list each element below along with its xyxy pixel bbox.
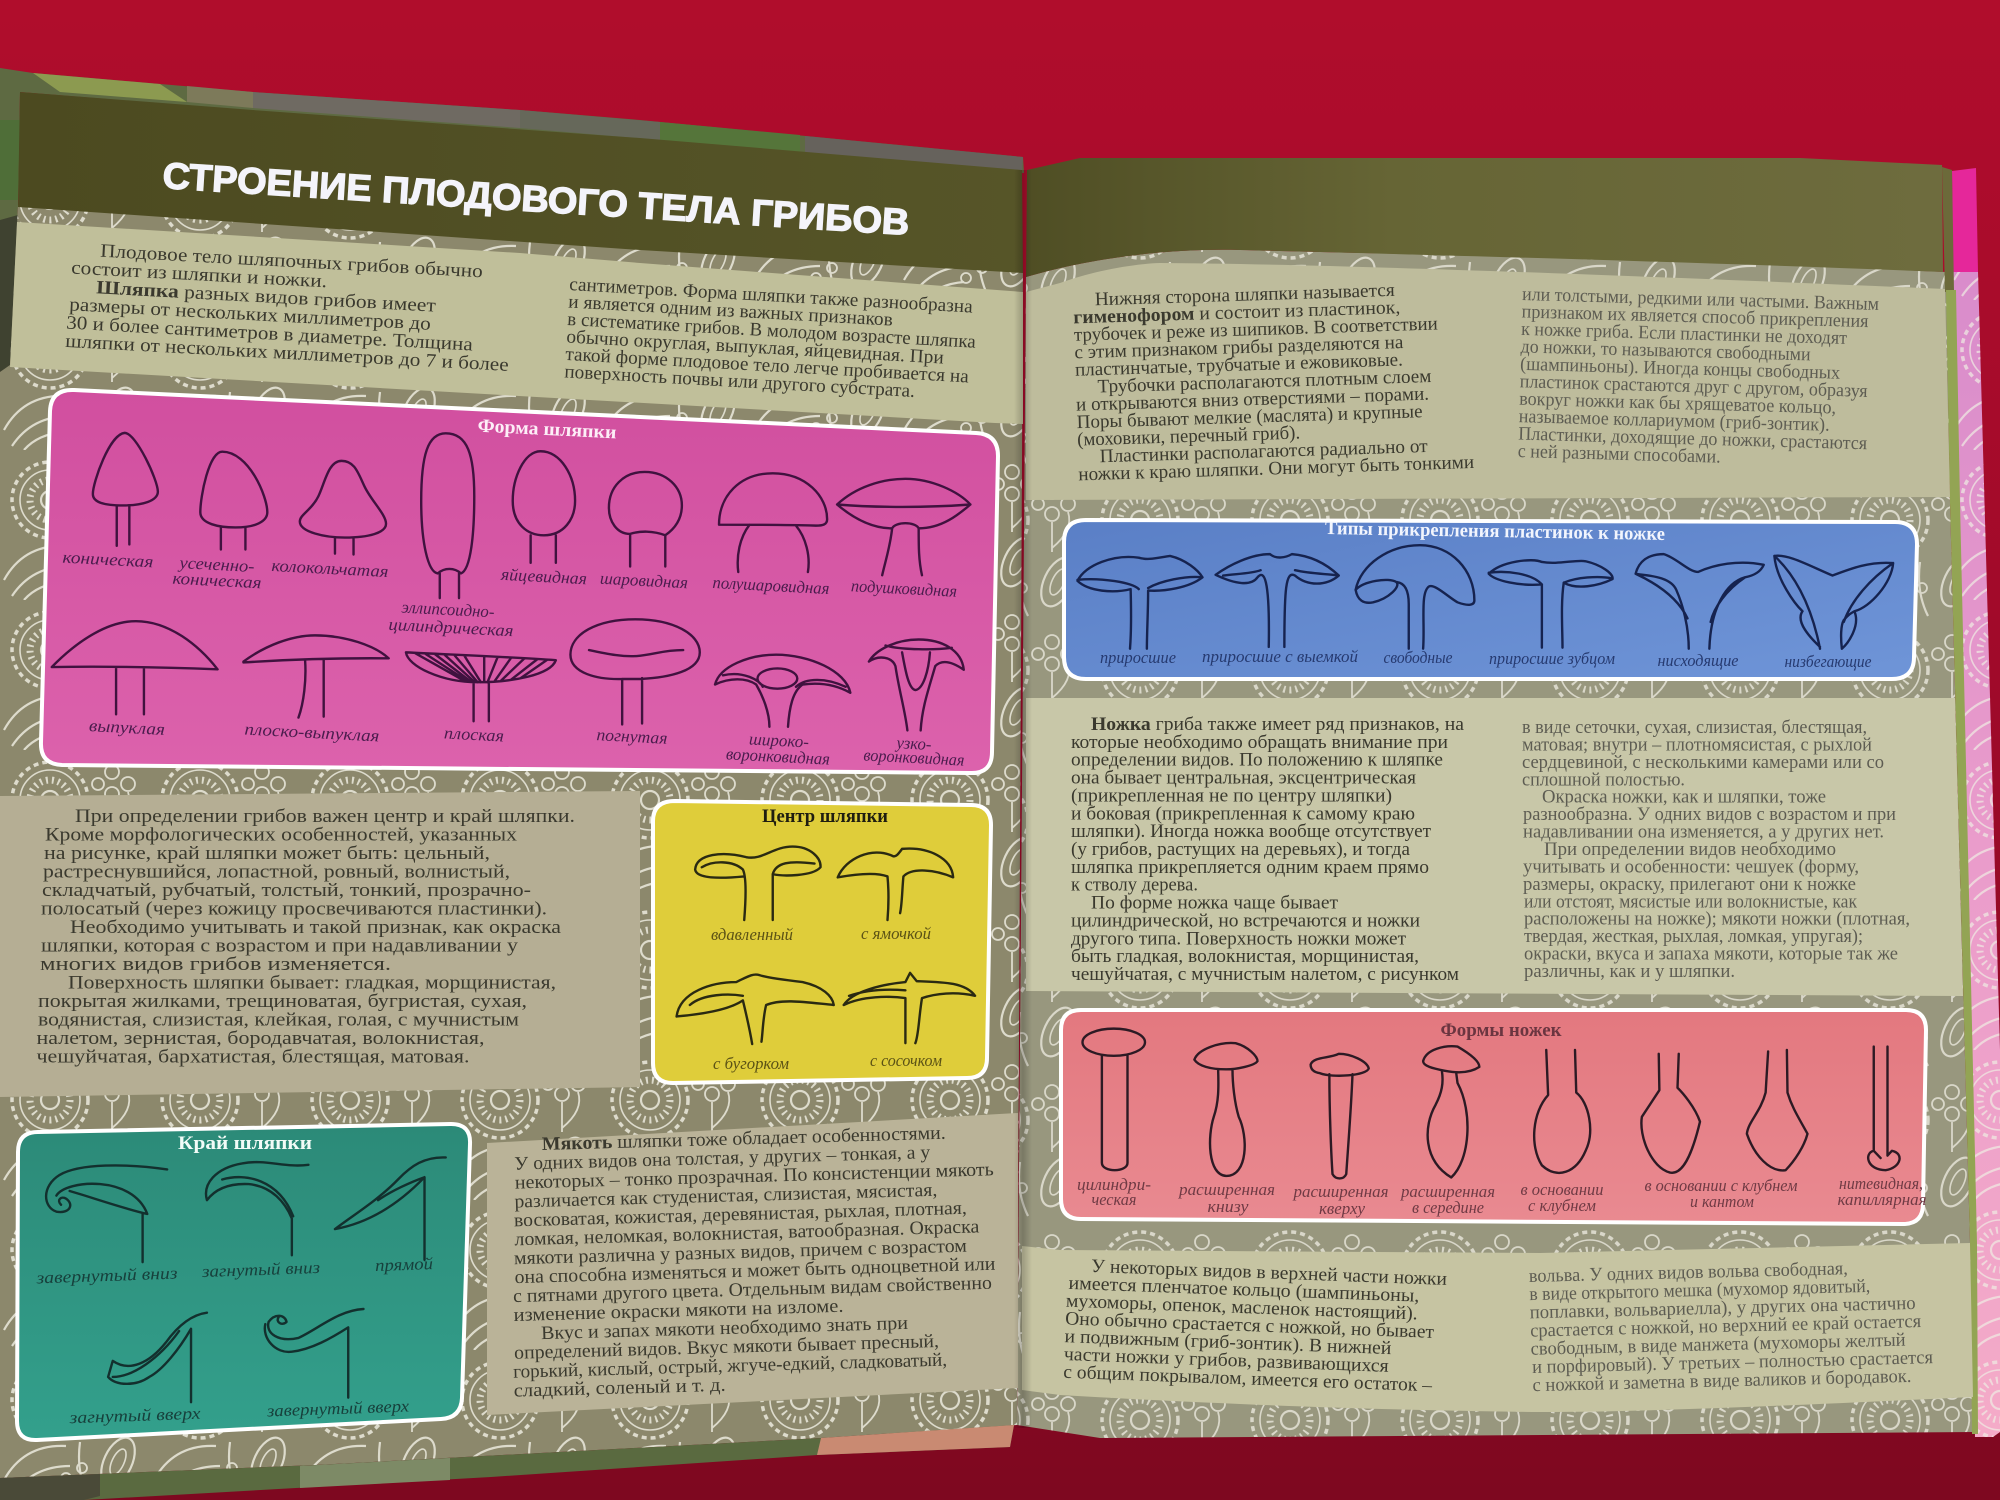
labels: cap center xyxy=(711,924,942,1073)
text block: volva column 2: в виде открытого мешка (мухомор ядовитый, xyxy=(1529,1276,1870,1305)
labels: stem shapes: кверху xyxy=(1319,1199,1365,1218)
panel: cap center xyxy=(653,801,991,1083)
labels: stem shapes: расширенная xyxy=(1178,1180,1275,1199)
pink next page edge xyxy=(1952,168,2000,1437)
text block: ring column 1: с общим покрывалом, имеется его остаток – xyxy=(1063,1362,1433,1396)
text block: volva column 2: поплавки, вольвариелла), у других она частично xyxy=(1529,1293,1916,1323)
text block: stem column 2: расположены на ножке); мякоти ножки (плотная, xyxy=(1524,909,1910,930)
panel: stem shapes xyxy=(1061,1010,1927,1224)
text block: stem column 2: надавливании она изменяется, а у других нет. xyxy=(1523,822,1884,843)
text block: hymenophore column 2: вокруг ножки как бы хрящеватое кольцо, xyxy=(1519,389,1836,419)
labels: stem shapes: капиллярная xyxy=(1838,1190,1927,1209)
header band left xyxy=(18,92,1023,273)
text block: flesh: с пятнами другого цвета. Отдельным видам свойственно xyxy=(513,1273,992,1307)
labels: cap margin: завернутый вниз xyxy=(35,1264,178,1287)
heading: stem shapes: Формы ножек xyxy=(1440,1020,1562,1041)
labels: cap shapes: цилиндрическая xyxy=(388,615,514,640)
text block: center and margin of cap: растреснувшийся, лопастной, ровный, волнистый, xyxy=(43,862,510,882)
labels: gill attachment: низбегающие xyxy=(1784,652,1872,671)
labels: gill attachment: свободные xyxy=(1384,648,1453,667)
labels: stem shapes xyxy=(1077,1174,1927,1218)
labels: cap shapes: яйцевидная xyxy=(500,565,588,588)
text block: stem column 2: окраски, вкуса и запаха мякоти, которые так же xyxy=(1524,944,1898,965)
panel: cap shape xyxy=(41,390,998,773)
labels: cap center: с ямочкой xyxy=(861,924,931,943)
text block: hymenophore column 1: и открываются вниз отверстиями – порами. xyxy=(1076,384,1429,416)
text block: stem column 2 xyxy=(1522,717,1910,982)
labels: gill attachment: приросшие зубцом xyxy=(1489,649,1615,668)
text block: hymenophore column 2: пластинок срастаются друг с другом, образуя xyxy=(1519,371,1868,402)
labels: cap center: вдавленный xyxy=(711,925,793,944)
text block: volva column 2 xyxy=(1529,1256,1934,1396)
text block: volva column 2: с ножкой и заметна в виде валиков и бородавок. xyxy=(1532,1366,1912,1396)
text block: stem column 2: разнообразна. У одних видов с возрастом и при xyxy=(1523,804,1896,825)
text block: flesh: Мякоть шляпки тоже обладает особенностями. xyxy=(542,1123,946,1155)
text block: stem column 1 xyxy=(1071,714,1465,985)
text block: center and margin of cap: Необходимо учитывать и такой признак, как окраска xyxy=(70,917,562,938)
text panel left bottom xyxy=(487,1113,1018,1415)
heading: cap center: Центр шляпки xyxy=(762,806,888,827)
heading: cap shape: Форма шляпки xyxy=(477,416,617,443)
text block: hymenophore column 1: Нижняя сторона шляпки называется xyxy=(1094,280,1395,310)
text block: flesh: ломкая, неломкая, волокнистая, ватообразная. Окраска xyxy=(514,1216,980,1250)
text block: stem column 1: По форме ножка чаще бывает xyxy=(1091,893,1339,914)
text block: stem column 1: определении видов. По положению к шляпке xyxy=(1071,750,1443,771)
text block: flesh: Вкус и запах мякоти необходимо знать при xyxy=(541,1313,908,1344)
text block: hymenophore column 2: признаком их является способ прикрепления xyxy=(1521,301,1869,332)
labels: stem shapes: ческая xyxy=(1092,1190,1137,1209)
text block: ring column 1: и подвижным (гриб-зонтик). В нижней xyxy=(1064,1326,1392,1359)
text block: hymenophore column 2: называемое коллариумом (гриб-зонтик). xyxy=(1518,406,1830,436)
right page lace background xyxy=(1017,250,1977,1438)
labels: cap shapes: широко- xyxy=(749,729,810,752)
labels: stem shapes: с клубнем xyxy=(1528,1196,1596,1215)
text block: stem column 2: или отстоят, мясистые или волокнистые, как xyxy=(1524,891,1858,912)
text block: ring column 1: имеется пленчатое кольцо (шампиньоны, xyxy=(1068,1273,1420,1307)
text block: stem column 1: другого типа. Поверхность ножки может xyxy=(1071,928,1407,949)
text block: hymenophore column 2: к ножке гриба. Если пластинки не доходят xyxy=(1521,319,1848,349)
text block: ring column 1 xyxy=(1063,1255,1447,1397)
labels: cap shapes: узко- xyxy=(894,733,932,754)
text block: ring column 1: части ножки у грибов, развивающихся xyxy=(1064,1344,1389,1377)
labels: gill attachment: приросшие xyxy=(1100,648,1176,667)
labels: cap margin xyxy=(35,1254,434,1427)
text block: hymenophore column 1: (моховики, перечный гриб). xyxy=(1077,423,1300,451)
labels: cap shapes: подушковидная xyxy=(851,576,958,601)
text panel right middle xyxy=(1026,698,1963,996)
text block: intro column 2 xyxy=(564,274,979,405)
text block: flesh: У одних видов она толстая, у других – тонкая, а у xyxy=(514,1142,931,1175)
text block: volva column 2: срастается с ножкой, но верхний ее край остается xyxy=(1530,1311,1922,1342)
text block: volva column 2: и порфировый). У третьих – полностью срастается xyxy=(1532,1347,1933,1378)
text block: hymenophore column 1: пластинчатые, трубчатые и ежовиковые. xyxy=(1075,349,1403,381)
text block: center and margin of cap: шляпки, которая с возрастом и при надавливании у xyxy=(41,936,519,956)
mushroom drawings: cap shapes xyxy=(52,433,970,730)
text block: hymenophore column 1: трубочек и реже из шипиков. В соответствии xyxy=(1074,313,1438,346)
text block: stem column 1: которые необходимо обращать внимание при xyxy=(1071,732,1448,753)
text block: hymenophore column 1: Пластинки располагаются радиально от xyxy=(1099,436,1429,467)
text block: ring column 1: У некоторых видов в верхней части ножки xyxy=(1091,1256,1447,1290)
text block: stem column 1: шляпка прикрепляется одним краем прямо xyxy=(1071,857,1429,878)
text block: intro column 2: поверхность почвы или другого субстрата. xyxy=(564,361,915,402)
text block: center and margin of cap: Поверхность шляпки бывает: гладкая, морщинистая, xyxy=(68,972,556,994)
text block: stem column 2: в виде сеточки, сухая, слизистая, блестящая, xyxy=(1522,717,1867,738)
labels: cap shapes: коническая xyxy=(172,569,262,592)
labels: stem shapes: нитевидная, xyxy=(1839,1174,1923,1193)
text block: flesh: горький, кислый, острый, жгуче-едкий, сладковатый, xyxy=(513,1350,947,1383)
labels: stem shapes: в основании xyxy=(1520,1180,1604,1199)
text block: stem column 1: Ножка гриба также имеет ряд признаков, на xyxy=(1091,714,1465,735)
text block: flesh: сладкий, соленый и т. д. xyxy=(513,1375,726,1402)
text block: stem column 1: и боковая (прикрепленная к самому краю xyxy=(1071,803,1415,824)
text block: center and margin of cap xyxy=(36,806,575,1068)
text block: flesh: мякоти различна у разных видов, причем с возрастом xyxy=(514,1236,967,1269)
text block: flesh: изменение окраски мякоти на изломе. xyxy=(513,1296,844,1326)
text block: hymenophore column 2: или толстыми, редкими или частыми. Важным xyxy=(1522,284,1879,315)
text block: hymenophore column 2: до ножки, то называются свободными xyxy=(1520,336,1811,365)
text block: flesh: она способна изменяться и может быть одноцветной или xyxy=(514,1254,996,1288)
spine shadow xyxy=(1014,170,1032,1428)
labels: cap shapes: полушаровидная xyxy=(712,573,830,598)
text block: intro column 1: 30 и более сантиметров в диаметре. Толщина xyxy=(66,313,474,356)
text block: intro column 2: обычно округлая, выпуклая, яйцевидная. При xyxy=(566,326,944,369)
text block: center and margin of cap: чешуйчатая, бархатистая, блестящая, матовая. xyxy=(36,1046,469,1068)
text block: hymenophore column 2: Пластинки, доходящие до ножки, срастаются xyxy=(1518,424,1868,454)
text block: intro column 1: шляпки от нескольких миллиметров до 7 и более xyxy=(65,331,509,376)
labels: cap shapes: эллипсоидно- xyxy=(401,598,495,621)
text block: intro column 1 xyxy=(65,239,514,376)
text block: ring column 1: мухоморы, опенок, масленок настоящий). xyxy=(1066,1291,1418,1324)
labels: cap shapes: усеченно- xyxy=(177,553,255,576)
heading: cap margin: Край шляпки xyxy=(178,1133,312,1154)
text block: hymenophore column 2 xyxy=(1517,284,1879,472)
labels: gill attachment xyxy=(1100,647,1872,671)
text block: flesh: определений видов. Вкус мякоти бывает пресный, xyxy=(514,1331,939,1364)
labels: stem shapes: и кантом xyxy=(1690,1192,1754,1211)
heading: gill attachment: Типы прикрепления пластинок к ножке xyxy=(1325,518,1665,545)
labels: cap shapes: шаровидная xyxy=(600,569,689,592)
text block: stem column 2: различны, как и у шляпки. xyxy=(1524,961,1735,982)
text block: center and margin of cap: многих видов грибов изменяется. xyxy=(40,954,391,975)
text block: center and margin of cap: При определении грибов важен центр и край шляпки. xyxy=(75,806,575,827)
panel: gill attachment xyxy=(1064,518,1917,679)
labels: cap center: с бугорком xyxy=(713,1054,789,1073)
text block: stem column 1: к стволу дерева. xyxy=(1071,875,1198,896)
labels: stem shapes: расширенная xyxy=(1293,1182,1389,1201)
text block: intro column 1: Плодовое тело шляпочных грибов обычно xyxy=(100,241,483,282)
text panel left middle xyxy=(0,791,640,1097)
text block: intro column 2: и является одним из важных признаков xyxy=(568,291,893,331)
text block: intro column 1: состоит из шляпки и ножки. xyxy=(71,258,327,292)
text block: hymenophore column 2: с ней разными способами. xyxy=(1517,441,1721,468)
labels: cap margin: прямой xyxy=(375,1254,434,1275)
text block: stem column 2: размеры, окраску, прилегают они к ножке xyxy=(1523,874,1856,895)
text block: stem column 1: быть гладкая, волокнистая, морщинистая, xyxy=(1071,946,1419,967)
mushroom drawings: cap center xyxy=(677,847,975,1044)
labels: cap shapes: плоская xyxy=(444,723,505,746)
text panel right bottom xyxy=(1022,1243,1973,1412)
text block: center and margin of cap: на рисунке, край шляпки может быть: цельный, xyxy=(44,843,490,864)
labels: stem shapes: в середине xyxy=(1412,1198,1484,1217)
photo strip bottom left xyxy=(0,1425,1014,1500)
panel: cap margin xyxy=(17,1124,470,1440)
labels: cap center: с сосочком xyxy=(870,1051,942,1070)
labels: cap margin: завернутый вверх xyxy=(266,1397,410,1420)
header band right xyxy=(1026,158,1943,277)
text block: stem column 2: твердая, жесткая, рыхлая, ломкая, упругая); xyxy=(1524,926,1863,947)
photo strip top left xyxy=(0,68,1024,372)
text block: stem column 2: Окраска ножки, как и шляпки, тоже xyxy=(1542,787,1826,808)
labels: cap shapes: плоско-выпуклая xyxy=(244,719,380,746)
labels: cap margin: загнутый вниз xyxy=(201,1258,321,1281)
text block: center and margin of cap: Кроме морфологических особенностей, указанных xyxy=(45,824,518,846)
labels: cap shapes xyxy=(62,548,965,770)
text block: hymenophore column 1 xyxy=(1072,278,1474,485)
text block: stem column 2: матовая; внутри – плотномясистая, с рыхлой xyxy=(1522,734,1872,755)
labels: cap shapes: погнутая xyxy=(596,725,668,748)
text block: stem column 2: сплошной полостью. xyxy=(1522,769,1685,790)
labels: cap shapes: выпуклая xyxy=(89,716,166,739)
labels: cap margin: загнутый вверх xyxy=(68,1404,201,1427)
text block: hymenophore column 1: с этим признаком грибы разделяются на xyxy=(1074,332,1404,363)
text block: hymenophore column 2: (шампиньоны). Иногда концы свободных xyxy=(1520,354,1841,384)
text block: intro column 1: размеры от нескольких миллиметров до xyxy=(69,294,431,335)
labels: gill attachment: приросшие с выемкой xyxy=(1202,647,1358,666)
labels: gill attachment: нисходящие xyxy=(1658,651,1739,670)
text panel right top xyxy=(1026,263,1950,500)
labels: cap shapes: колокольчатая xyxy=(271,556,389,581)
labels: cap shapes: коническая xyxy=(62,548,154,571)
text block: center and margin of cap: налетом, зернистая, бородавчатая, волокнистая, xyxy=(36,1028,484,1049)
text block: flesh: восковатая, кожистая, деревянистая, рыхлая, плотная, xyxy=(514,1198,967,1231)
text block: stem column 1: (прикрепленная не по центру шляпки) xyxy=(1071,785,1392,806)
text block: stem column 2: При определении видов необходимо xyxy=(1544,839,1836,860)
labels: stem shapes: расширенная xyxy=(1400,1182,1495,1201)
text block: volva column 2: свободным, в виде манжета (мухоморы желтый xyxy=(1530,1330,1906,1360)
text block: intro column 2: в систематике грибов. В молодом возрасте шляпка xyxy=(567,309,977,353)
labels: stem shapes: книзу xyxy=(1208,1197,1249,1216)
text block: stem column 1: чешуйчатая, с мучнистым налетом, с рисунком xyxy=(1071,964,1459,985)
mushroom drawings: gill attachment xyxy=(1078,545,1893,649)
text block: center and margin of cap: складчатый, рубчатый, толстый, тонкий, прозрачно- xyxy=(42,880,531,901)
text block: stem column 1: цилиндрической, но встречаются и ножки xyxy=(1071,910,1420,932)
green page edge strip xyxy=(1942,167,1978,1434)
text block: intro column 1: Шляпка разных видов грибов имеет xyxy=(96,277,437,317)
text block: stem column 1: шляпки). Иногда ножка вообще отсутствует xyxy=(1071,821,1432,842)
text block: stem column 2: сердцевиной, с несколькими камерами или со xyxy=(1522,752,1884,773)
text block: intro column 2: сантиметров. Форма шляпки также разнообразна xyxy=(569,274,974,318)
text block: hymenophore column 1: гименофором и состоит из пластинок, xyxy=(1073,297,1401,328)
text block: center and margin of cap: покрытая жилками, трещиноватая, бугристая, сухая, xyxy=(38,991,527,1012)
title: СТРОЕНИЕ ПЛОДОВОГО ТЕЛА ГРИБОВ xyxy=(161,155,911,243)
labels: stem shapes: в основании с клубнем xyxy=(1644,1176,1798,1195)
mushroom drawings: stem shapes xyxy=(1082,1029,1900,1178)
text block: stem column 1: она бывает центральная, эксцентрическая xyxy=(1071,768,1416,789)
text block: center and margin of cap: полосатый (через кожицу просвечиваются пластинки). xyxy=(41,898,547,920)
text block: hymenophore column 1: Трубочки располагаются плотным слоем xyxy=(1097,366,1432,398)
mushroom drawings: cap margin xyxy=(46,1157,446,1402)
labels: cap shapes: воронковидная xyxy=(726,744,831,769)
text block: hymenophore column 1: ножки к краю шляпки. Они могут быть тонкими xyxy=(1078,452,1474,485)
left page lace background xyxy=(0,205,1023,1478)
text block: stem column 1: (у грибов, растущих на деревьях), и тогда xyxy=(1071,839,1411,860)
text block: flesh xyxy=(507,1121,1000,1402)
labels: stem shapes: цилиндри- xyxy=(1077,1175,1151,1194)
text block: intro column 2: такой форме плодовое тело легче пробивается на xyxy=(565,344,970,387)
text block: volva column 2: вольва. У одних видов вольва свободная, xyxy=(1529,1258,1848,1287)
text block: center and margin of cap: водянистая, слизистая, клейкая, голая, с мучнистым xyxy=(38,1010,519,1030)
text block: flesh: некоторых – тонко прозрачная. По консистенции мякоть xyxy=(515,1159,994,1194)
text block: stem column 2: учитывать и особенности: чешуек (форму, xyxy=(1523,856,1859,877)
text block: flesh: различается как студенистая, слизистая, мясистая, xyxy=(514,1180,938,1213)
text block: ring column 1: Оно обычно срастается с ножкой, но бывает xyxy=(1065,1308,1435,1343)
text block: hymenophore column 1: Поры бывают мелкие (маслята) и крупные xyxy=(1076,401,1423,433)
labels: cap shapes: воронковидная xyxy=(863,745,965,770)
text panel left top xyxy=(10,222,1023,424)
